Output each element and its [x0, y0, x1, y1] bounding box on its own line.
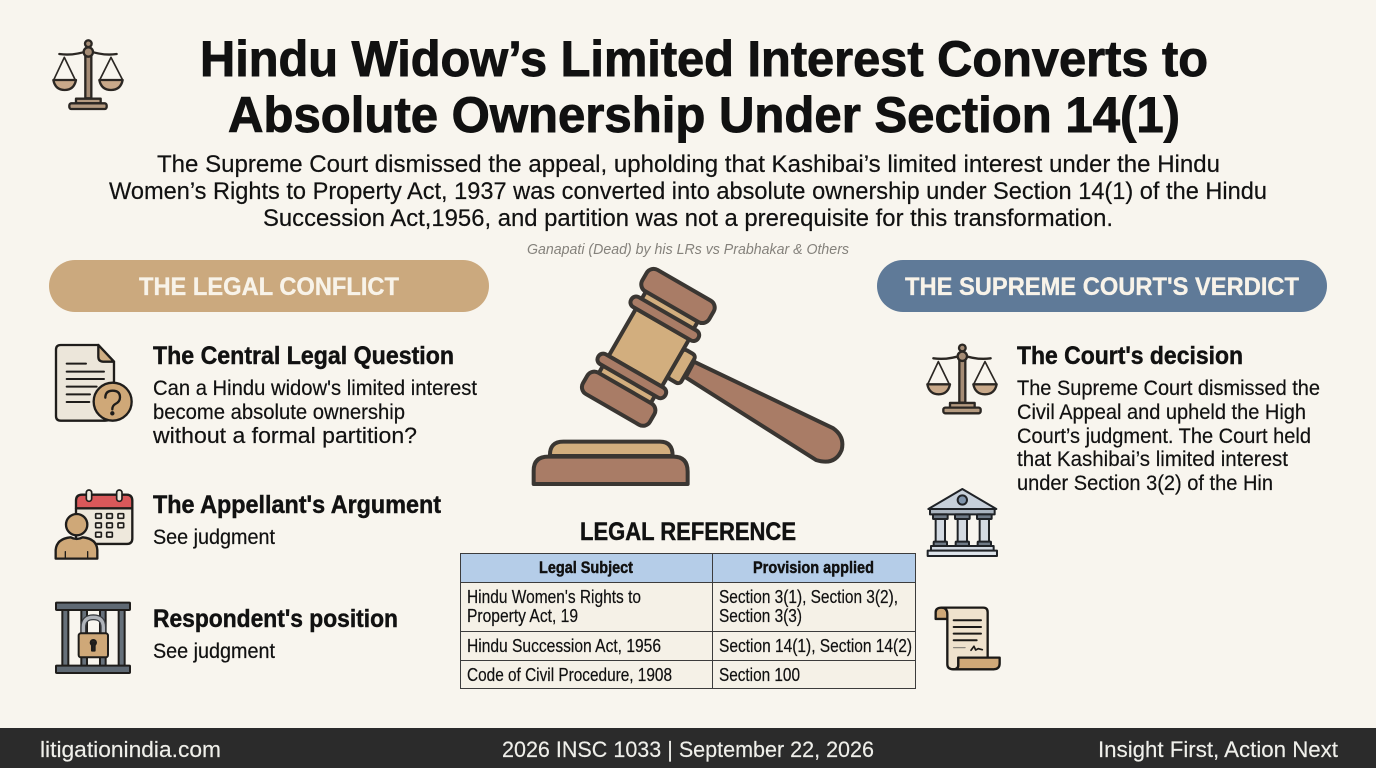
text: central question body: become absolute ownership [153, 401, 405, 424]
heading: the court's decision: The Court's decision [1017, 342, 1243, 370]
icon: document with question mark [56, 345, 132, 421]
heading: respondent's position: Respondent's position [153, 605, 398, 633]
title [200, 31, 1208, 143]
icon: scales of justice, verdict [927, 345, 997, 413]
table: legal reference: Section 3(3) [719, 606, 802, 626]
subtitle summary: Succession Act,1956, and partition was not a prerequisite for this transformation. [263, 205, 1113, 232]
footer: tagline: Insight First, Action Next [1098, 737, 1338, 762]
panel heading: the supreme court's verdict: THE SUPREME COURT'S VERDICT [905, 273, 1299, 301]
text: central question body [152, 377, 477, 448]
heading: the appellant's argument: The Appellant's Argument [153, 491, 442, 519]
subtitle summary: Women’s Rights to Property Act, 1937 was converted into absolute ownership under Section 14(1) of the Hindu [109, 178, 1267, 205]
icon: signed scroll [936, 608, 1000, 669]
panel heading: the legal conflict: THE LEGAL CONFLICT [139, 273, 399, 301]
panel heading: the supreme court's verdict [877, 260, 1327, 312]
table: legal reference: Provision applied [753, 558, 874, 577]
footer: citation and date: 2026 INSC 1033 | September 22, 2026 [502, 737, 874, 762]
text: respondent body: See judgment [153, 640, 275, 663]
text: appellant body: See judgment [153, 526, 275, 549]
text: central question body: without a formal partition? [152, 423, 417, 448]
table: legal reference: Section 100 [719, 665, 800, 685]
subtitle summary [109, 151, 1267, 232]
panel: legal conflict items [56, 342, 477, 673]
table: legal reference: Section 14(1), Section 14(2) [719, 636, 912, 656]
icon: court building [928, 489, 997, 556]
table: legal reference: Code of Civil Procedure, 1908 [467, 665, 672, 685]
text: court's decision body [1017, 377, 1320, 495]
footer: website: litigationindia.com [40, 737, 221, 762]
text: central question body: Can a Hindu widow's limited interest [153, 377, 477, 400]
table: legal reference: Hindu Women's Rights to [467, 587, 641, 607]
heading: legal reference: LEGAL REFERENCE [580, 518, 796, 546]
text: court's decision body: Civil Appeal and upheld the High [1017, 401, 1306, 424]
subtitle summary: The Supreme Court dismissed the appeal, upholding that Kashibai’s limited interest under the Hindu [157, 151, 1220, 178]
table: legal reference: Property Act, 19 [467, 606, 578, 626]
text: court's decision body: The Supreme Court dismissed the [1017, 377, 1320, 400]
title: Hindu Widow’s Limited Interest Converts to [200, 31, 1208, 87]
heading: the central legal question: The Central Legal Question [153, 342, 454, 370]
table: legal reference [460, 553, 916, 689]
text: court's decision body: under Section 3(2) of the Hin [1017, 472, 1273, 495]
text: court's decision body: Court’s judgment. The Court held [1017, 425, 1311, 448]
text: court's decision body: that Kashibai’s limited interest [1017, 448, 1288, 471]
footer bar [0, 728, 1376, 768]
icon: person with calendar [56, 490, 132, 559]
table: legal reference: Legal Subject [539, 558, 633, 577]
panel heading: the legal conflict [49, 260, 489, 312]
icon: scales of justice, header [53, 40, 123, 109]
icon: gavel and sound block [534, 266, 842, 484]
icon: padlock on bars [56, 603, 130, 673]
table: legal reference: Section 3(1), Section 3(2), [719, 587, 898, 607]
case citation: Ganapati (Dead) by his LRs vs Prabhakar & Others [527, 241, 849, 258]
table: legal reference: Hindu Succession Act, 1956 [467, 636, 661, 656]
panel: supreme court verdict items [927, 342, 1320, 669]
title: Absolute Ownership Under Section 14(1) [228, 87, 1180, 143]
